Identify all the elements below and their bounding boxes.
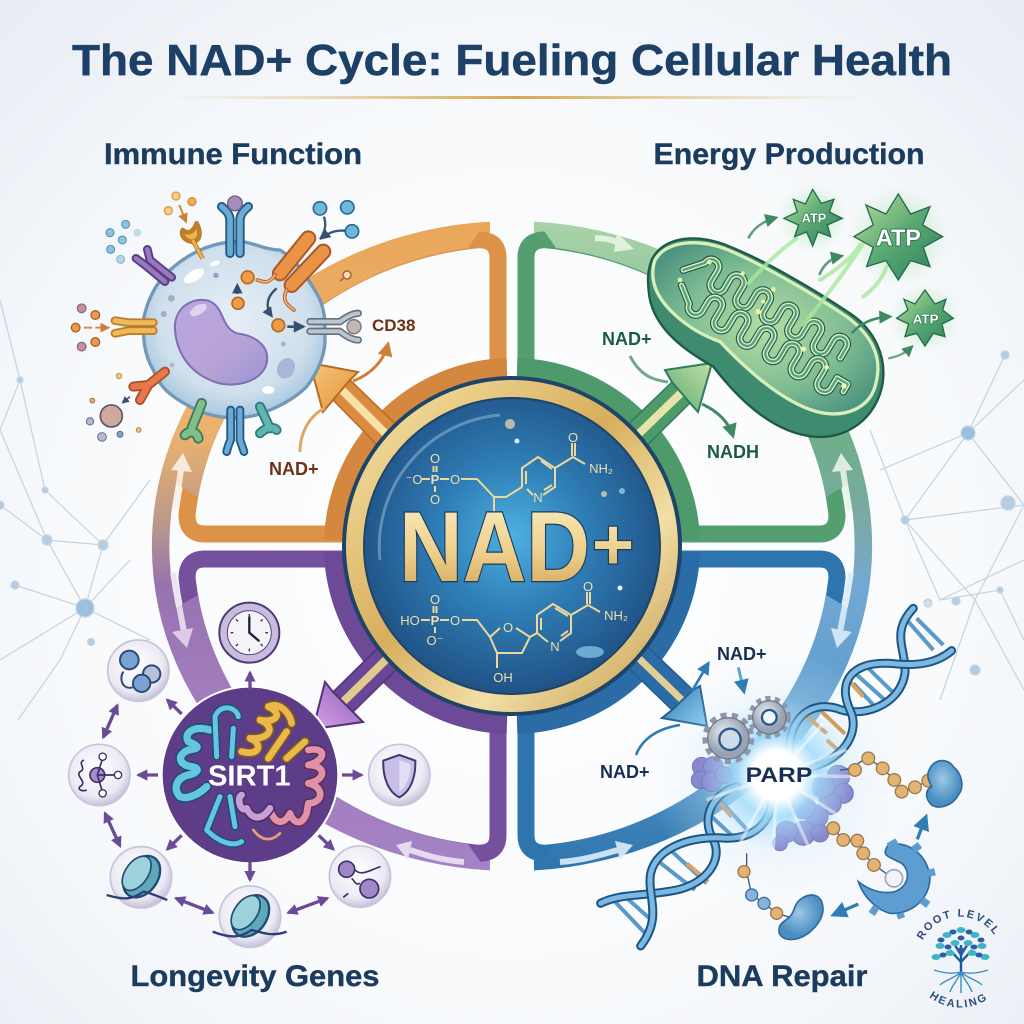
satellite: molecules [108,640,169,701]
lower molecule: O [450,613,460,628]
NAD+ and NADH labels energy: NADH [707,442,759,462]
logo: Root Level Healing: HEALING [930,991,986,1008]
NAD+ labels DNA repair [600,644,767,782]
SIRT1 label: SIRT1 [208,760,291,792]
lower molecule: O [583,579,593,594]
polymer chains [747,758,928,918]
receptor: CD38 grey [310,313,358,340]
satellite: nucleosome bottom [213,886,287,947]
receptor: left gold [115,321,153,333]
upper DNA strands [790,608,952,767]
blue blob right [927,761,962,807]
lower DNA strands [601,787,772,946]
ATP star right [897,290,953,346]
receptor: top blue [222,207,248,253]
mitochondrion body [648,238,883,437]
radial arrows [103,673,362,913]
lower molecule: O [503,620,513,635]
lower DNA rungs [613,800,753,937]
NAD+ input immune [269,408,325,479]
SIRT1 hub illustration [69,603,430,947]
central NAD+ orb [342,376,682,716]
burst core and rays [700,698,853,852]
arrow: to immune cell [310,363,412,460]
heading: dna repair: DNA Repair [696,960,868,993]
logo: Root Level Healing: ROOT LEVEL [916,909,998,940]
frame: purple quadrant [187,559,498,853]
lower molecule: N [550,639,560,654]
receptor: yellow crescent [182,223,203,259]
pale flow arrows on cycle [171,233,853,862]
frame: blue quadrant [526,559,837,853]
gears [706,699,788,761]
upper molecule: O [430,451,440,466]
CD38 label and arrow: CD38 [372,316,415,335]
outer cycle ring right [534,222,872,870]
satellite: nucleosome left [107,847,172,908]
NAD+ and NADH labels energy: NAD+ [602,329,652,349]
outer cycle ring left [152,222,490,870]
lower molecule: P [431,613,440,628]
heading: immune function: Immune Function [104,138,362,171]
central ring quadrants [335,369,689,723]
receptor: purple fork [136,249,172,282]
CD38 label and arrow [353,316,415,381]
upper molecule: O [450,472,460,487]
frame: orange quadrant [187,240,498,534]
ATP star small top: ATP [802,212,827,226]
merged band bottom left [161,595,486,870]
ATP star large [854,194,943,280]
upper molecule: NH₂ [589,461,613,476]
hub circle [161,686,339,864]
lower molecule: NH₂ [604,608,628,623]
frame: green quadrant [526,240,837,534]
small arrows [917,817,926,839]
satellite: molecules right [329,846,391,907]
ATP star small top [784,189,842,246]
heading: energy production: Energy Production [654,138,924,171]
NAD+ label: + [592,505,634,585]
upper DNA rungs [805,618,943,753]
satellite: clock [219,603,279,663]
immune cell illustration [71,192,361,452]
nucleus [175,300,267,385]
heading: longevity genes: Longevity Genes [130,960,380,993]
cell body [143,241,325,418]
merged band bottom right [538,595,863,870]
protein ribbons [176,705,322,844]
receptor: orange channel [280,238,323,285]
ATP star right: ATP [913,311,939,326]
outer glow [650,650,903,903]
lower molecule: O [430,592,440,607]
purple protein blobs [691,757,853,851]
blue gear [858,842,935,918]
arrow: to PARP [612,632,707,726]
upper molecule [406,430,613,512]
blue blob bottom [779,895,823,940]
small key icon on band [340,271,351,281]
lower molecule [400,579,628,685]
NAD+ input immune: NAD+ [269,459,319,479]
title: The NAD+ Cycle: Fueling Cellular Health [72,36,952,85]
NAD+ and NADH labels energy [602,329,759,462]
background network left [0,300,150,720]
NAD+ labels DNA repair: NAD+ [600,762,650,782]
merged band top right [538,222,863,497]
NAD+ labels DNA repair: NAD+ [717,644,767,664]
satellite: shield [369,744,430,806]
ATP star large: ATP [876,224,921,250]
upper molecule: O [430,492,440,507]
arrow: to SIRT1 [313,634,412,729]
lower molecule: O⁻ [427,633,443,648]
mitochondrion illustration [648,183,960,437]
receptors: bottom green, blue, teal [185,403,202,438]
upper molecule: P [431,472,440,487]
satellite: network node [69,744,130,806]
PARP label: PARP [746,763,812,787]
upper molecule: N [533,490,543,505]
arrow: to mitochondrion [612,363,712,460]
merged band top left [161,222,486,497]
cristae folds [682,259,848,392]
lower molecule: HO [400,613,420,628]
NAD+ label: NAD [399,491,590,602]
PARP DNA repair illustration [601,608,962,946]
logo: Root Level Healing [916,909,998,1008]
upper molecule: O [568,430,578,445]
upper molecule: ⁻O [406,472,422,487]
ATP glows and streams [778,183,848,253]
background network right [870,351,1024,700]
lower molecule: OH [493,670,513,685]
receptor: red fork [133,372,165,400]
green energy streams [748,238,887,325]
